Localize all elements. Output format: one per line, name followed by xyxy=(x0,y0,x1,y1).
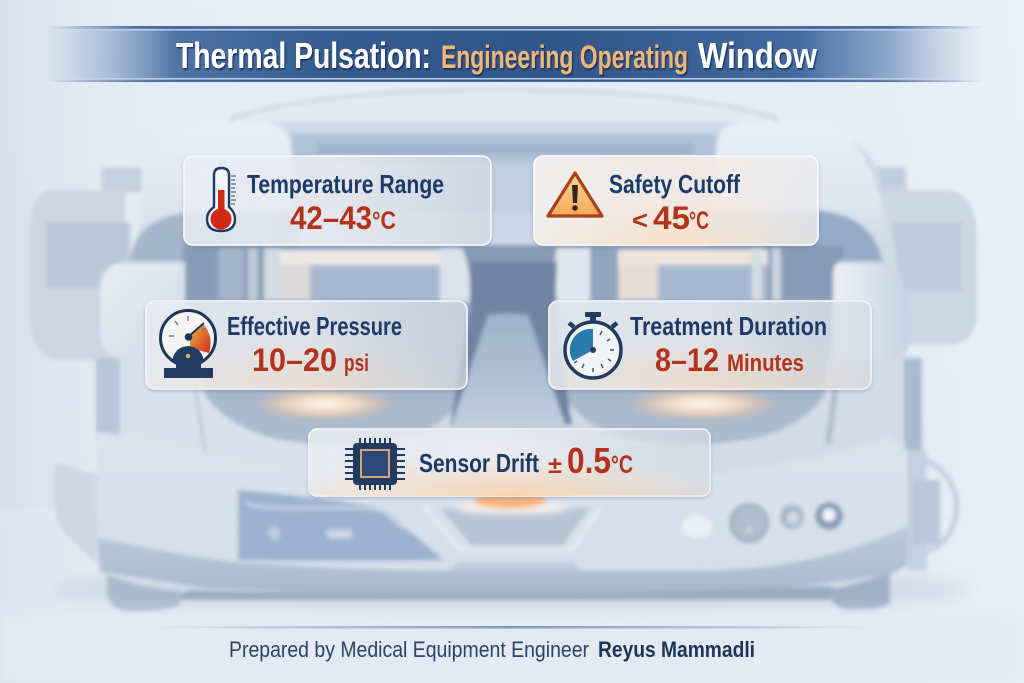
skirt band xyxy=(97,527,907,595)
footer credit: Prepared by Medical Equipment Engineer xyxy=(229,637,589,662)
value: less than 45 °C: 45 xyxy=(653,200,690,236)
title banner xyxy=(45,26,985,82)
title: Thermal Pulsation: xyxy=(176,35,431,76)
icon: stopwatch xyxy=(565,312,621,378)
eye recesses xyxy=(130,210,882,262)
value: 42–43 °C: 42–43 xyxy=(290,200,372,236)
front centre notch xyxy=(424,502,600,571)
feet xyxy=(107,574,890,612)
icon: warning triangle xyxy=(548,173,602,216)
device top arc xyxy=(232,89,776,180)
panel: temperature range xyxy=(184,156,491,245)
value: 10–20 psi: psi xyxy=(344,350,369,377)
label: effective pressure: Effective Pressure xyxy=(227,311,402,341)
value: 8–12 minutes xyxy=(655,342,804,378)
icon: pressure gauge xyxy=(160,310,216,378)
icon: microchip xyxy=(345,438,405,490)
panel: safety cutoff xyxy=(534,156,818,245)
top display panel xyxy=(291,133,716,252)
panel: treatment duration xyxy=(549,301,871,389)
eye recess dark band xyxy=(183,245,843,305)
value: 8–12 minutes: Minutes xyxy=(727,350,804,377)
floor shadow xyxy=(50,566,970,614)
main head body xyxy=(125,122,905,440)
column strips xyxy=(96,358,922,450)
value: 10–20 psi: 10–20 xyxy=(252,342,337,378)
left lower module xyxy=(54,462,97,565)
label: treatment duration: Treatment Duration xyxy=(630,311,827,341)
icon: thermometer xyxy=(207,168,236,231)
right side bracket xyxy=(907,450,957,570)
value: plus-minus 0.5 °C: ± xyxy=(548,452,562,478)
value: plus-minus 0.5 °C xyxy=(548,440,633,481)
middle pods xyxy=(100,262,910,362)
panel: effective pressure xyxy=(146,301,467,389)
footer credit: Reyus Mammadli xyxy=(598,637,755,662)
right eyepiece xyxy=(554,248,835,445)
value: less than 45 °C xyxy=(632,200,709,236)
value: less than 45 °C: < xyxy=(632,205,648,235)
cheeks xyxy=(122,360,902,480)
title: Window xyxy=(698,35,818,76)
outer side modules xyxy=(30,167,977,360)
title xyxy=(176,35,818,76)
value: plus-minus 0.5 °C: °C xyxy=(611,451,633,479)
footer rule xyxy=(150,626,875,628)
front blue panel xyxy=(238,490,450,561)
under shadow xyxy=(160,586,860,600)
value: 42–43 °C: °C xyxy=(372,207,396,235)
front controls xyxy=(682,502,843,543)
panel: sensor drift xyxy=(309,429,710,496)
value: less than 45 °C: °C xyxy=(689,207,709,235)
label: sensor drift: Sensor Drift xyxy=(419,448,539,478)
label: temperature range: Temperature Range xyxy=(247,169,444,199)
value: 8–12 minutes: 8–12 xyxy=(655,342,719,378)
label: safety cutoff: Safety Cutoff xyxy=(609,169,740,199)
lower body xyxy=(97,432,907,570)
nose bridge xyxy=(450,262,572,425)
title: Engineering Operating xyxy=(441,39,688,75)
left eyepiece xyxy=(190,248,470,445)
upper pods xyxy=(140,122,890,262)
soft highlights xyxy=(0,492,1024,683)
value: plus-minus 0.5 °C: 0.5 xyxy=(567,440,611,481)
